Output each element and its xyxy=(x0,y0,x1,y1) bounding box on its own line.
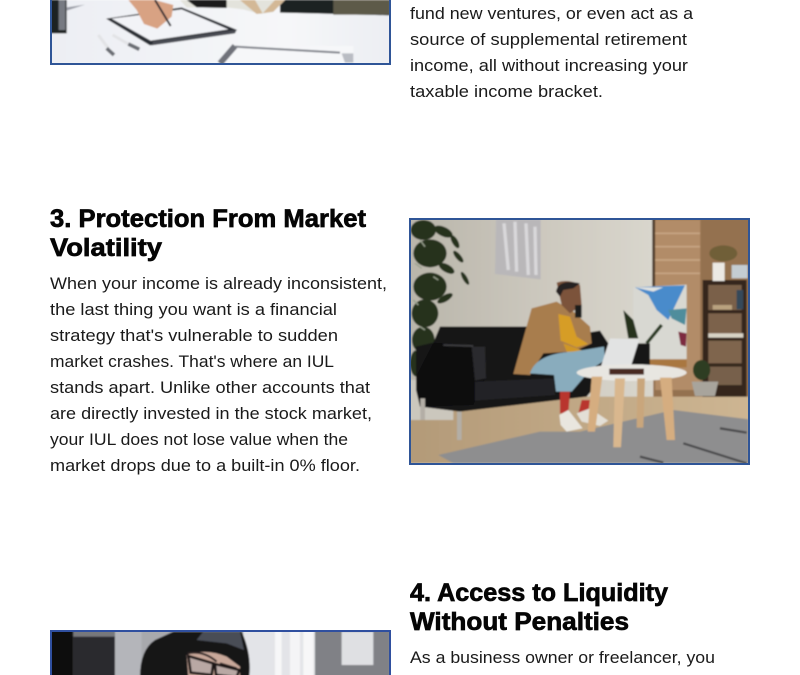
colourful canvas xyxy=(652,284,688,360)
text block: section 3 body xyxy=(50,275,387,475)
photo: woman with glasses xyxy=(50,630,390,675)
pens xyxy=(98,35,128,48)
text block: section 3 body: are directly invested in the stock market, xyxy=(50,405,372,423)
potted plants xyxy=(692,382,718,396)
tall plant xyxy=(410,220,471,377)
table xyxy=(577,364,687,381)
heading: section 3: 3. Protection From Market xyxy=(50,205,367,233)
text block: end of section 2: fund new ventures, or even act as a xyxy=(410,5,694,23)
tablet xyxy=(220,46,353,63)
photo: man on a phone on a sofa with a laptop xyxy=(410,218,750,464)
text block: section 3 body: stands apart. Unlike other accounts that xyxy=(50,379,370,397)
hand and pen xyxy=(128,0,173,29)
laptop xyxy=(600,338,639,369)
text block: end of section 2: taxable income bracket. xyxy=(410,83,603,101)
text block: end of section 2: income, all without increasing your xyxy=(410,57,689,75)
text block: section 4 body: As a business owner or freelancer, you xyxy=(410,649,715,667)
text block: end of section 2 xyxy=(410,5,694,101)
heading: section 4: 4. Access to Liquidity xyxy=(410,579,668,607)
rug xyxy=(438,410,748,463)
wall painting xyxy=(495,219,541,279)
heading: section 3 xyxy=(50,205,367,262)
clipboard xyxy=(106,7,237,45)
heading: section 4 xyxy=(410,579,668,636)
heading: section 4: Without Penalties xyxy=(410,608,629,636)
text block: section 3 body: market crashes. That's where an IUL xyxy=(50,353,334,371)
man xyxy=(513,302,592,375)
photo: person signing a document at a desk xyxy=(50,0,390,64)
text block: section 3 body: market drops due to a built-in 0% floor. xyxy=(50,457,360,475)
text block: section 3 body: When your income is already inconsistent, xyxy=(50,275,387,293)
sofa xyxy=(416,327,650,412)
text block: section 3 body: the last thing you want is a financial xyxy=(50,301,337,319)
shelf xyxy=(703,280,747,397)
text block: end of section 2: source of supplemental retirement xyxy=(410,31,687,49)
text block: section 3 body: your IUL does not lose value when the xyxy=(50,431,348,449)
heading: section 3: Volatility xyxy=(50,234,162,262)
text block: section 3 body: strategy that's vulnerable to sudden xyxy=(50,327,338,345)
